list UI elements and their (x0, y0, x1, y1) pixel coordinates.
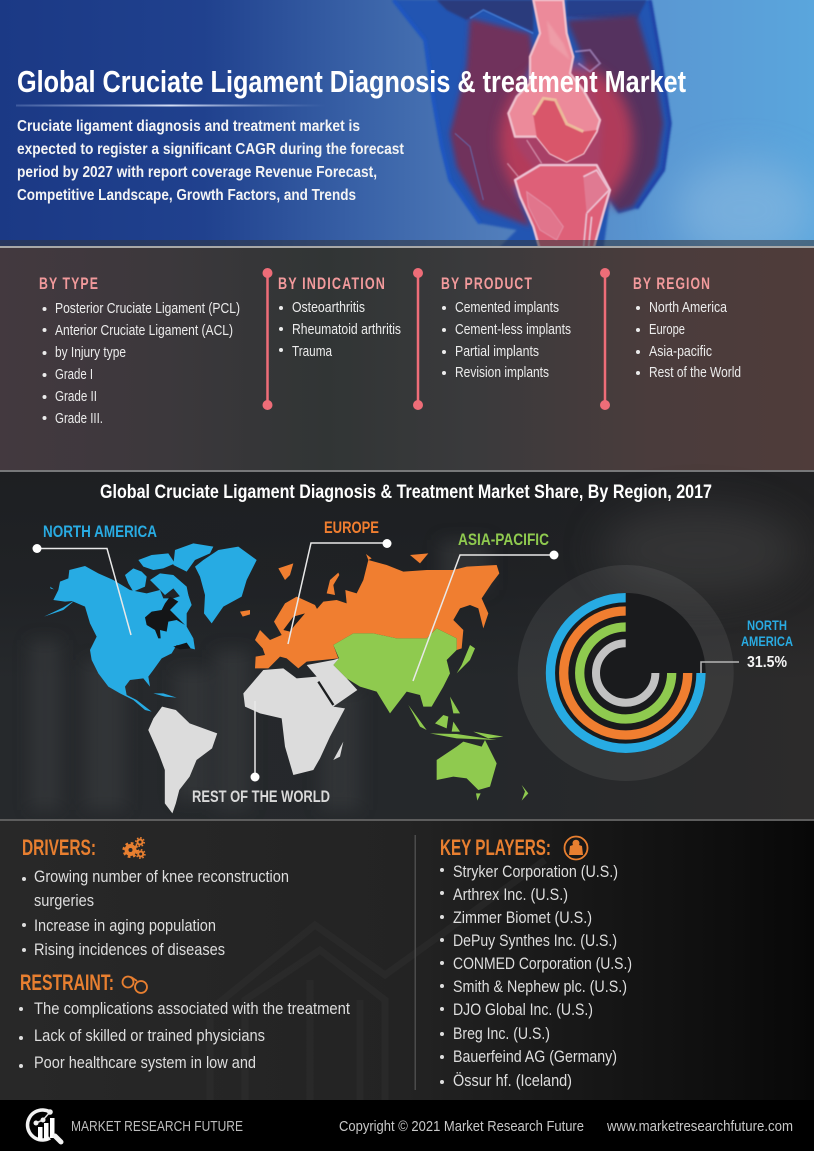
panel: key players: Össur hf. (Iceland) (453, 1071, 572, 1090)
intro text block: expected to register a significant CAGR during the forecast (17, 141, 405, 158)
panel: key players: CONMED Corporation (U.S.) (453, 954, 632, 973)
icon: gears (124, 838, 145, 858)
panel: drivers: surgeries (34, 891, 94, 910)
panel: by type: by Injury type (55, 345, 126, 361)
panel: by product (441, 274, 571, 381)
panel: key players: Stryker Corporation (U.S.) (453, 862, 618, 881)
panel: key players: DJO Global Inc. (U.S.) (453, 1000, 593, 1019)
map: africa and middle east (243, 658, 357, 775)
footer: www.marketresearchfuture.com (606, 1118, 793, 1135)
callout: north america share: NORTH (747, 617, 787, 633)
panel: by type: Grade III. (55, 411, 103, 427)
map: eurasia, africa and oceania (240, 553, 528, 801)
panel: key players: KEY PLAYERS: (440, 835, 551, 860)
callout: north america share: AMERICA (741, 633, 793, 649)
panel: by indication: Rheumatoid arthritis (292, 322, 401, 338)
world map (44, 543, 528, 813)
panel: by type: Posterior Cruciate Ligament (PCL) (55, 301, 240, 317)
panel: by indication: BY INDICATION (278, 274, 386, 293)
map: europe and russia (240, 553, 499, 668)
divider: type and indication (263, 268, 272, 410)
panel: key players (440, 835, 632, 1090)
panel: drivers: Increase in aging population (34, 916, 216, 935)
panel: by region (633, 274, 741, 381)
panel: by product: Revision implants (455, 365, 549, 381)
panel: key players: Smith & Nephew plc. (U.S.) (453, 977, 627, 996)
panel: by region: Rest of the World (649, 365, 741, 381)
panel: key players: Arthrex Inc. (U.S.) (453, 885, 568, 904)
chart: radial market share (518, 565, 739, 781)
callout: asia-pacific (413, 530, 558, 681)
panel: by product: Cement-less implants (455, 322, 571, 338)
panel: by indication (278, 274, 401, 360)
panel: by type: Grade II (55, 389, 97, 405)
map: north america (44, 543, 257, 712)
callout: north america share: 31.5% (747, 654, 787, 671)
callout: europe (288, 518, 392, 644)
panel: by indication: Osteoarthritis (292, 300, 365, 316)
map: south america (148, 707, 217, 813)
divider: indication and product (414, 268, 422, 410)
panel: by region: Europe (649, 322, 685, 338)
footer (0, 1100, 814, 1151)
callout: rest of the world: REST OF THE WORLD (192, 787, 330, 806)
panel: restraint: Poor healthcare system in low and (34, 1053, 256, 1072)
hero banner background (0, 0, 814, 260)
callout: north america: NORTH AMERICA (43, 522, 157, 541)
panel: drivers: Growing number of knee reconstruction (34, 867, 289, 886)
panel: restraint: RESTRAINT: (20, 970, 114, 995)
footer: MARKET RESEARCH FUTURE (71, 1118, 243, 1135)
icon: players target (564, 836, 588, 860)
footer: Copyright © 2021 Market Research Future (339, 1118, 584, 1135)
intro text block (17, 118, 405, 204)
callout: north america (32, 522, 157, 635)
panel: key players: Bauerfeind AG (Germany) (453, 1047, 617, 1066)
panel: drivers: Rising incidences of diseases (34, 940, 225, 959)
panel: restraint: Lack of skilled or trained physicians (34, 1026, 265, 1045)
illustration: knee joint x-ray (393, 0, 670, 250)
icon: handcuffs (122, 976, 147, 993)
title underline rule (16, 104, 326, 106)
icon: market research future logo (28, 1109, 61, 1142)
divider: product and region (600, 268, 610, 410)
hero bottom shade (0, 240, 814, 247)
panel: drivers (22, 835, 289, 959)
panel: drivers and key players background (0, 819, 814, 1100)
panel: by type: Anterior Cruciate Ligament (ACL) (55, 323, 233, 339)
panel: by region: North America (649, 300, 728, 316)
panel: key players: Breg Inc. (U.S.) (453, 1024, 550, 1043)
panel: by type: Grade I (55, 367, 93, 383)
panel: by product: Partial implants (455, 344, 539, 360)
panel: by type: BY TYPE (39, 274, 99, 293)
callout: rest of the world (192, 701, 330, 806)
panel: by indication: Trauma (292, 344, 333, 360)
callout: north america share (741, 617, 793, 671)
callout: asia-pacific: ASIA-PACIFIC (458, 530, 549, 549)
panel: by region: Asia-pacific (649, 344, 712, 360)
intro text block: Competitive Landscape, Growth Factors, and Trends (17, 187, 356, 204)
panel: key players: Zimmer Biomet (U.S.) (453, 908, 592, 927)
intro text block: period by 2027 with report coverage Revenue Forecast, (17, 164, 377, 181)
panel: by type (39, 274, 240, 427)
map: asia-pacific (333, 628, 528, 801)
panel: key players: DePuy Synthes Inc. (U.S.) (453, 931, 617, 950)
panel: drivers: DRIVERS: (22, 835, 96, 860)
chart title: Global Cruciate Ligament Diagnosis & Treatment Market Share, By Region, 2017 (100, 482, 712, 503)
panel: restraint (19, 970, 350, 1072)
panel: by product: BY PRODUCT (441, 274, 533, 293)
panel: market share map background (0, 470, 814, 820)
panel: by region: BY REGION (633, 274, 711, 293)
callout: europe: EUROPE (324, 518, 379, 537)
panel: restraint: The complications associated with the treatment (34, 999, 350, 1018)
intro text block: Cruciate ligament diagnosis and treatment market is (17, 118, 360, 135)
panel: by product: Cemented implants (455, 300, 559, 316)
panel: segmentation background (0, 246, 814, 470)
